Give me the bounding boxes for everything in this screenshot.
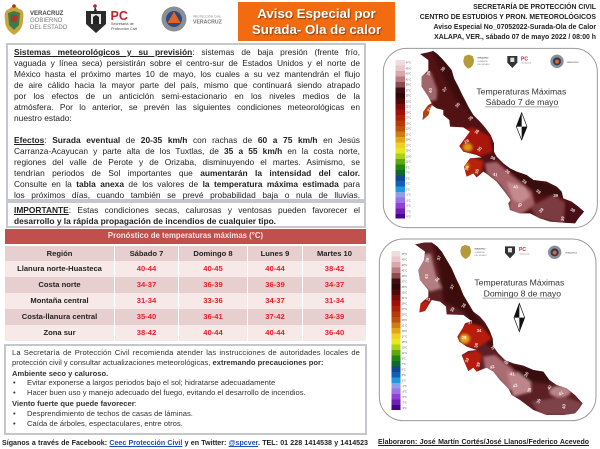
institutional header text: Aviso Especial No_07052022-Surada-Ola de Calor [433,24,596,31]
table: forecast of maximum temperatures [5,229,366,342]
color scale legend: 39°C [402,275,407,278]
map value labels: 39 [503,359,510,366]
table header row: Lunes 9 [261,249,289,258]
row: Costa norte: 34-37 [137,280,156,289]
panel: map Saturday 7 May [382,48,598,228]
footer credits: Elaboraron: José Martín Cortés/José Llanos/Federico Acevedo [378,439,589,446]
row: Llanura norte-Huasteca: 40-45 [203,264,223,273]
mini logos: Secretaría de [519,252,529,255]
mini logos [463,55,579,69]
color scale legend: 23°C [402,319,407,322]
panel: civil protection recommendations: • [13,378,16,387]
table title [5,229,366,244]
table header row: Sábado 7 [130,249,163,258]
color scale legend: 27°C [402,308,407,311]
color scale legend: 33°C [402,292,407,295]
panel: civil protection recommendations [4,344,367,435]
map value labels: 40 [561,403,567,409]
color scale legend [396,60,411,219]
panel: civil protection recommendations: Hacer buen uso y manejo adecuado del fuego, evitando el desarrollo de incendios. [27,388,306,397]
map value labels: 36 [473,128,481,135]
map title: Temperaturas Máximas [474,278,565,288]
color scale legend: 21°C [402,325,407,328]
map value labels: 39 [475,361,481,368]
map value labels: 41 [510,371,515,376]
mini logos: Secretaría de [521,61,531,64]
row: Montaña central: Montaña central [30,296,89,305]
map value labels: 37 [441,86,449,93]
map value labels: 41 [513,184,519,190]
row: Zona sur [5,325,366,341]
map value labels: 38 [535,188,542,195]
map value labels: 35 [467,114,475,122]
map value labels: 40 [546,384,553,391]
map value labels: 36 [454,101,461,108]
color scale legend: 43°C [402,264,407,267]
map value labels: 42 [489,364,496,370]
panel: weather systems and effects: regiones del valle de Perote y de Orizaba, disminuyendo el martes. Asimismo, se [14,157,360,167]
institutional header text: XALAPA, VER., sábado 07 de mayo 2022 / 08:00 h [434,34,596,41]
map value labels: 43 [512,382,519,389]
map value labels: 32 [426,106,433,113]
color scale legend: 19°C [402,330,407,333]
row: Montaña central: 34-37 [265,296,285,305]
row: Costa-llanura central: 35-40 [137,312,156,321]
table title: Pronóstico de temperaturas máximas (°C) [108,231,263,240]
color scale legend: 23°C [406,128,411,131]
map value labels [426,65,577,222]
row: Llanura norte-Huasteca [5,261,366,277]
map value labels: 28 [462,335,467,340]
row: Costa-llanura central: 36-41 [203,312,223,321]
map value labels: 39 [449,306,456,313]
row: Montaña central: 31-34 [325,296,344,305]
panel: weather systems and effects: Efectos: Surada eventual de 20-35 km/h con rachas de 60 a 75 km/h en Jesús [14,135,360,145]
logo text: Veracruz: VERACRUZ [30,11,64,17]
panel: weather systems and effects: nuestro estado: [14,113,72,123]
map value labels: 32 [464,356,470,363]
map value labels: 41 [492,172,499,178]
color scale legend: 7°C [406,172,410,175]
color scale legend: 19°C [406,139,411,142]
icon: civil protection emblem [162,6,186,32]
color scale legend: 15°C [402,341,407,344]
panel: weather systems and effects: de aire cálido hacia la mayor parte del país, mismo que continuará siendo atrapado [14,80,360,90]
panel: civil protection recommendations: protección civil y consultar actualizaciones meteorológicas, extremando precauciones por: [12,358,324,367]
row: Costa norte: 34-37 [325,280,344,289]
row: Zona sur: 40-44 [265,328,285,337]
color scale legend: 9°C [406,166,410,169]
map value labels: 35 [476,145,483,152]
map value labels: 36 [504,168,512,175]
row: Zona sur: 40-44 [203,328,223,337]
mini logos: PC [521,57,528,63]
color scale legend: 3°C [402,374,406,377]
color scale legend: -3°C [406,199,411,202]
map value labels: 38 [490,155,497,161]
row: Llanura norte-Huasteca: Llanura norte-Huasteca [17,264,102,273]
panel: weather systems and effects: por los efectos de un anticiclón semi-estacionario en los niveles medios de la [14,91,360,101]
panel: weather systems and effects: Carranza-Acayucan y parte alta de los Tuxtlas, de 35 a 55 km/h en la costa norte, [14,146,360,156]
color scale legend: -7°C [406,210,411,213]
color scale legend: 39°C [406,84,411,87]
logos header [4,4,223,35]
map value labels: 39 [526,387,532,393]
panel: civil protection recommendations: Ambiente seco y caluroso. [12,369,108,378]
row: Costa-llanura central [5,309,366,325]
row: Costa-llanura central: Costa-llanura central [22,312,97,321]
color scale legend: 41°C [402,270,407,273]
panel: civil protection recommendations: Caída de árboles, espectaculares, entre otros. [27,419,183,428]
map title: Sábado 7 de mayo [486,97,559,107]
map title: Domingo 8 de mayo [484,288,561,298]
color scale legend: 29°C [406,111,411,114]
panel: civil protection recommendations: • [13,388,16,397]
logo text: Protección Civil Veracruz [193,14,223,26]
logo text: Protección Civil Veracruz: PROTECCIÓN CIVIL [193,14,222,18]
map value labels: 37 [449,283,456,290]
table header row [5,246,366,261]
row: Costa-llanura central: 34-39 [325,312,344,321]
panel: weather systems and effects: México hasta el próximo martes 10 de mayo, los cuales a su vez mantendrán el flujo [14,69,360,79]
icon: north arrow [514,303,525,332]
row: Montaña central: 31-34 [137,296,156,305]
map value labels: 37 [436,254,442,261]
color scale legend: 43°C [406,73,411,76]
panel: weather systems and effects: atmósfera. Por lo anterior, se prevén las siguientes condiciones meteorológicas en [14,102,360,112]
color scale legend: 1°C [406,188,410,191]
color scale legend: 25°C [402,314,407,317]
map title [476,87,567,107]
color scale legend: 11°C [402,352,407,355]
title banner [238,2,395,41]
mini logos: VERACRUZ [477,57,489,60]
color scale legend: 5°C [406,177,410,180]
color scale legend: 31°C [406,106,411,109]
mini logos [460,245,578,259]
logo text: Protección Civil: Protección Civil [111,27,137,31]
row: Zona sur: 36-40 [325,328,344,337]
color scale legend: 25°C [406,122,411,125]
map value labels: 39 [560,215,566,222]
map value labels: 39 [426,70,432,76]
map: Veracruz temperature shading [420,51,584,224]
mini logos: GOBIERNO [477,61,489,63]
panel: weather systems and effects [6,43,366,201]
color scale legend: -7°C [402,402,407,405]
institutional header text: CENTRO DE ESTUDIOS Y PRON. METEOROLÓGICOS [420,14,596,21]
row: Montaña central: 33-36 [203,296,223,305]
color scale legend: -5°C [406,205,411,208]
color scale legend: 11°C [406,161,411,164]
color scale legend: 31°C [402,297,407,300]
color scale legend: 9°C [402,358,406,361]
institutional header text: SECRETARÍA DE PROTECCIÓN CIVIL [473,4,596,11]
logo text: Del Estado: DEL ESTADO [30,25,68,31]
mini logos: PC [519,247,526,253]
panel: important notice: IMPORTANTE: Estas condiciones secas, calurosas y ventosas pueden favorecer el [14,205,360,215]
map value labels: 40 [428,87,433,93]
institutional header text [420,2,596,41]
panel: weather systems and effects: Sistemas meteorológicos y su previsión: sistemas de baja presión (frente frío, [14,47,360,57]
map value labels: 34 [477,328,482,333]
icon: Veracruz state shield [5,4,24,35]
table header row: Región [47,249,72,258]
color scale legend: 15°C [406,150,411,153]
map title: Temperaturas Máximas [476,87,567,97]
color scale legend: 7°C [402,363,406,366]
row: Llanura norte-Huasteca: 38-42 [325,264,344,273]
color scale legend: 41°C [406,78,411,81]
color scale legend: 45°C [406,67,411,70]
color scale legend: -9°C [402,407,407,410]
map value labels: 36 [439,65,447,72]
map value labels: 31 [425,296,432,302]
map value labels [424,254,567,409]
row: Costa norte [5,277,366,293]
panel: weather systems and effects: Consulte en la tabla anexa de los valores de la temperatura máxima estimada para [14,179,360,189]
color scale legend: 3°C [406,183,410,186]
color scale legend: -5°C [402,396,407,399]
color scale legend: 45°C [402,259,407,262]
row: Costa norte: Costa norte [38,280,81,289]
map value labels: 41 [558,390,565,397]
row: Zona sur: 38-42 [137,328,156,337]
map value labels: 39 [538,206,545,214]
map value labels: 36 [434,276,441,283]
panel: weather systems and effects: tendrían periodos de Sol importantes que aumentarán la intensidad del calor. [14,168,360,178]
map value labels: 38 [490,343,497,351]
map value labels: 28 [463,138,470,145]
title banner: Surada- Ola de calor [252,22,381,37]
panel: map Sunday 8 May [378,238,596,422]
color scale legend: 27°C [406,117,411,120]
color scale legend: -1°C [406,194,411,197]
row: Llanura norte-Huasteca: 40-44 [137,264,156,273]
map value labels: 39 [535,397,542,404]
map value labels: 36 [473,342,479,348]
map value labels: 38 [521,178,528,185]
panel: civil protection recommendations: La Secretaría de Protección Civil recomienda atender las instrucciones de autoridades locales de [12,348,360,357]
icon: Protección Civil shield [86,4,106,33]
panel: civil protection recommendations: • [13,409,16,418]
map value labels: 40 [516,201,524,209]
color scale legend [391,251,407,410]
color scale legend: 37°C [402,281,407,284]
map value labels: 39 [424,257,430,263]
color scale legend: 21°C [406,133,411,136]
color scale legend: 35°C [406,95,411,98]
logo text: Gobierno: GOBIERNO [30,18,63,24]
map value labels: 36 [474,168,480,174]
table header row: Domingo 8 [193,249,233,258]
color scale legend: 29°C [402,303,407,306]
row: Zona sur: Zona sur [43,328,76,337]
row: Llanura norte-Huasteca: 40-44 [265,264,285,273]
panel: civil protection recommendations: • [13,419,16,428]
footer contact line: Síganos a través de Facebook: Ceec Protección Civil y en Twitter: @spcver. TEL: 01 228 1414538 y 1414523 [2,439,368,447]
map value labels: 39 [553,193,559,198]
panel: important notice: desarrollo y la rápida propagación de incendios de cualquier tipo. [14,216,276,226]
color scale legend: 33°C [406,100,411,103]
title banner: Aviso Especial por [257,6,376,21]
row: Costa-llanura central: 37-42 [265,312,285,321]
row: Costa norte: 36-39 [203,280,223,289]
color scale legend: -3°C [402,391,407,394]
row: Montaña central [5,293,366,309]
map value labels: 30 [464,165,470,171]
mini logos: VERACRUZ [474,248,486,251]
logo text: PC: PC [110,9,128,23]
map value labels: 38 [569,207,577,214]
map title [474,278,565,299]
panel: civil protection recommendations: Evitar exponerse a largos periodos bajo el sol; hidratarse adecuadamente [27,378,275,387]
map value labels: 36 [523,370,530,378]
panel: important notice [6,201,366,228]
map value labels: 37 [467,319,474,325]
mini logos: DEL ESTADO [477,63,490,66]
mini logos: DEL ESTADO [474,254,487,257]
color scale legend: 47°C [406,62,411,65]
mini logos: GOBIERNO [474,252,486,254]
row: Costa norte: 36-39 [265,280,285,289]
color scale legend: -1°C [402,385,407,388]
panel: weather systems and effects: los próximos días, cuando también se prevé probabilidad baja o nula de lluvias. [14,190,360,200]
logo text: Protección Civil Veracruz: VERACRUZ [193,20,223,26]
color scale legend: 5°C [402,369,406,372]
color scale legend: 35°C [402,286,407,289]
color scale legend: 17°C [402,336,407,339]
logo text: Secretaría de: Secretaría de [111,22,134,26]
color scale legend: 1°C [402,380,406,383]
color scale legend: 37°C [406,89,411,92]
map value labels: 36 [460,302,467,309]
mini logos: VERACRUZ [565,252,578,255]
map: Veracruz temperature shading [415,242,583,415]
map value labels: 43 [424,273,429,279]
table header row: Martes 10 [317,249,352,258]
color scale legend: 13°C [402,347,407,350]
map frame [383,48,597,228]
color scale legend: 13°C [406,155,411,158]
color scale legend: -9°C [406,216,411,219]
color scale legend: 17°C [406,144,411,147]
mini logos: VERACRUZ [567,61,579,64]
panel: civil protection recommendations: Viento fuerte que puede favorecer: [12,399,137,408]
panel: weather systems and effects: vaguada y línea seca) persistirán sobre el centro-sur de Estados Unidos y el norte de [14,58,360,68]
map frame [379,239,596,421]
icon: north arrow [516,113,527,140]
color scale legend: 47°C [402,253,407,256]
panel: civil protection recommendations: Desprendimiento de techos de casas de láminas. [27,409,193,418]
